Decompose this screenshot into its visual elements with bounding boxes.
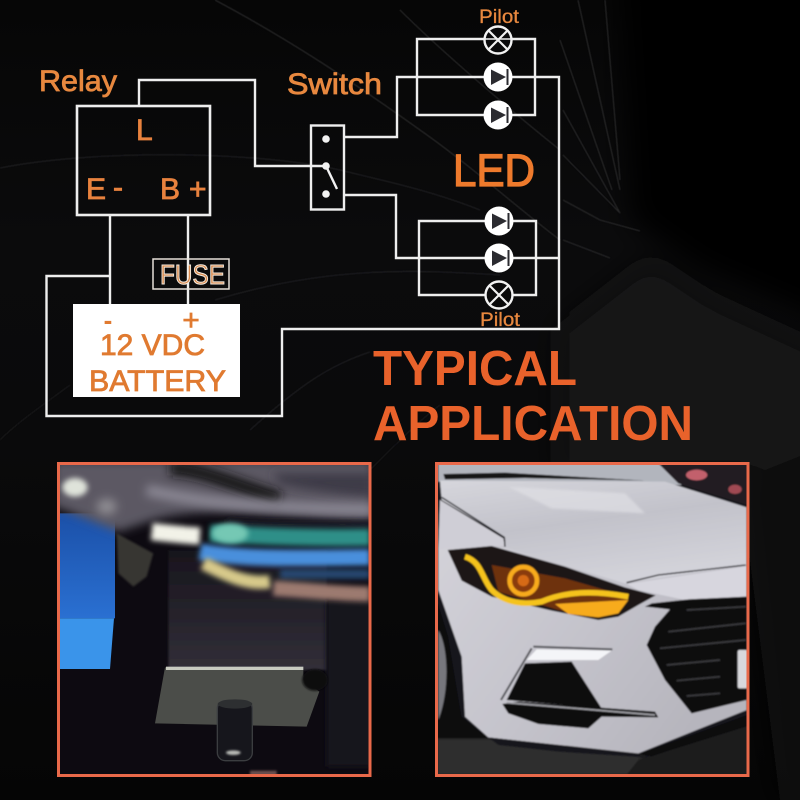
gray wire mass <box>53 460 373 532</box>
background top right <box>660 465 746 504</box>
coloured wires <box>210 533 370 538</box>
heading: TYPICAL <box>373 342 577 396</box>
photo: relay module <box>53 460 373 780</box>
label: relay: Relay <box>39 65 117 98</box>
front panel <box>627 566 747 600</box>
box body <box>168 550 327 670</box>
headlight <box>448 546 656 620</box>
label: pilot bottom: Pilot <box>480 310 521 331</box>
relay box <box>77 106 210 215</box>
relay box: - <box>113 171 123 204</box>
led bottom 2 <box>484 244 514 272</box>
battery: - <box>104 305 112 335</box>
wires <box>46 39 559 416</box>
windshield <box>438 463 682 485</box>
fog lamp DRL <box>527 649 612 660</box>
label: pilot top: Pilot <box>479 7 520 28</box>
spider <box>117 533 153 587</box>
fender <box>438 500 505 550</box>
fog intake <box>507 662 602 708</box>
battery: + <box>182 304 200 337</box>
led bottom 1 <box>484 206 514 236</box>
battery <box>73 304 240 398</box>
switch symbol <box>311 126 344 210</box>
module <box>155 667 319 727</box>
wheel <box>438 604 487 738</box>
body <box>438 547 747 753</box>
fuse label: FUSE <box>160 259 225 290</box>
battery: 12 VDC <box>100 329 205 362</box>
lower bumper <box>638 715 747 757</box>
led top 1 <box>484 62 512 92</box>
led top 2 <box>484 100 512 130</box>
blue block <box>58 513 115 618</box>
ground <box>435 737 642 777</box>
relay box: + <box>189 173 207 206</box>
wiring diagram <box>39 7 559 416</box>
heading: APPLICATION <box>373 397 693 451</box>
relay box: B <box>160 173 180 206</box>
grille <box>645 597 747 713</box>
relay box: L <box>136 114 153 147</box>
battery: BATTERY <box>89 365 226 398</box>
heading <box>373 342 693 451</box>
hood <box>440 481 747 583</box>
relay box: E <box>86 173 106 206</box>
pilot lamp top <box>484 26 512 54</box>
pilot lamp bottom <box>486 282 512 308</box>
label: led: LED <box>453 145 535 196</box>
connector cylinder <box>217 701 252 761</box>
label: switch: Switch <box>287 68 382 101</box>
photo: car headlight <box>435 463 748 777</box>
